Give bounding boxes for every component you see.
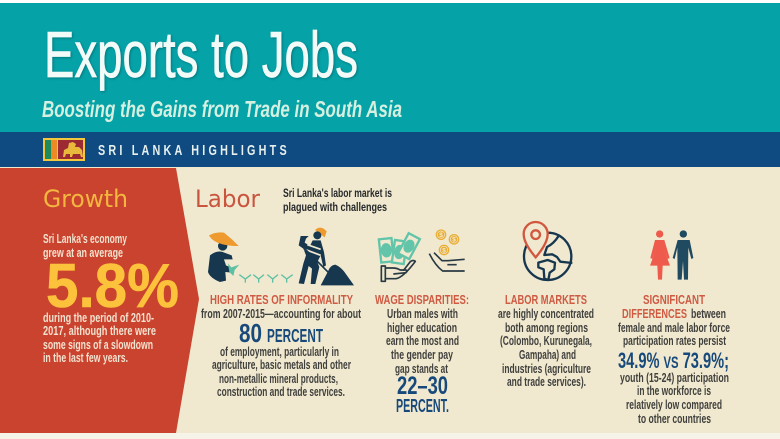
figure: 80 percent: PERCENT [267, 326, 323, 346]
panel: wage text [375, 292, 469, 416]
growth detail text [43, 311, 156, 365]
icon: farmer planting [208, 232, 293, 283]
icon: coins in hand: $ [442, 247, 446, 254]
panel: differences text: to other countries [638, 412, 711, 426]
icon: coins in hand: $ [439, 232, 443, 239]
panel: labor markets text: (Colombo, Kurunegala, [500, 334, 592, 348]
labor heading: Labor [195, 185, 260, 213]
panel: informality text: non-metallic mineral products, [219, 372, 338, 386]
panel: differences text: SIGNIFICANT [643, 292, 705, 307]
growth intro text: Sri Lanka's economy [43, 232, 127, 246]
panel: labor background [0, 167, 780, 433]
figure: 22-30 percent [396, 372, 449, 416]
panel: differences text: between [691, 307, 726, 321]
panel: wage text: the gender pay [391, 348, 453, 362]
icon: worker with shovel [299, 228, 354, 285]
figure: 22-30 percent: 22–30 [397, 372, 448, 400]
panel: wage text: earn the most and [386, 334, 459, 348]
panel: labor markets text [498, 292, 594, 389]
open hand [381, 260, 415, 281]
panel: labor markets text: Gampaha) and [519, 348, 576, 362]
panel: differences text: participation rates persist [623, 334, 727, 348]
subtitle: Boosting the Gains from Trade in South Asia [42, 96, 402, 122]
panel: labor markets text: industries (agriculture [502, 362, 591, 376]
panel: wage text: Urban males with [387, 307, 458, 321]
panel: labor markets text: LABOR MARKETS [505, 292, 587, 307]
panel: country band [0, 132, 780, 167]
figure: participation rates: 34.9% VS 73.9%; [618, 348, 729, 373]
labor intro: plagued with challenges [283, 200, 387, 214]
labor intro [283, 186, 392, 214]
panel: wage text: higher education [387, 321, 457, 335]
panel: labor markets text: are highly concentrated [498, 307, 594, 321]
panel: wage text: gap stands at [395, 362, 449, 376]
growth intro text: grew at an average [43, 246, 123, 260]
woman [650, 230, 670, 280]
labor intro: Sri Lanka's labor market is [283, 186, 392, 200]
panel: labor markets text: and trade services). [507, 375, 586, 389]
panel: informality text: construction and trade services. [217, 385, 345, 399]
growth detail text: 2017, although there were [43, 324, 156, 338]
icon: cash in hand [379, 233, 420, 281]
man [673, 230, 693, 280]
icon: woman and man [650, 230, 693, 280]
banknotes [379, 233, 420, 264]
panel: informality text: HIGH RATES OF INFORMALITY [210, 292, 353, 307]
panel: differences text [618, 292, 730, 426]
panel: informality text: from 2007-2015—accounting for about [201, 307, 362, 321]
title: Exports to Jobs [44, 18, 358, 91]
panel: growth [0, 168, 199, 433]
growth detail text: some signs of a slowdown [43, 338, 153, 352]
seedlings [239, 275, 293, 283]
panel: differences text: youth (15-24) participation [620, 371, 729, 385]
panel: differences text: relatively low compared [626, 398, 722, 412]
figure: 80 percent [239, 318, 323, 348]
icon: Sri Lanka flag [43, 138, 85, 161]
growth figure: 5.8% [46, 252, 179, 321]
panel: differences text: DIFFERENCES [622, 306, 687, 321]
panel: wage text: WAGE DISPARITIES: [375, 292, 469, 307]
growth detail text: in the last few years. [43, 351, 128, 365]
band label: SRI LANKA HIGHLIGHTS [98, 141, 287, 158]
panel: informality text: of employment, particularly in [220, 345, 339, 359]
icon: coins in hand [429, 229, 465, 271]
growth heading: Growth [43, 185, 128, 213]
panel: labor markets text: both among regions [505, 321, 588, 335]
growth detail text: during the period of 2010- [43, 311, 154, 325]
panel: header banner [0, 3, 780, 132]
figure: 80 percent: 80 [239, 318, 262, 348]
panel: differences text: in the workforce is [637, 384, 711, 398]
growth intro text [43, 232, 127, 260]
figure: 22-30 percent: PERCENT. [396, 396, 449, 416]
icon: coins in hand: $ [452, 236, 456, 243]
icon: location pin and globe [524, 222, 572, 280]
panel: informality text [201, 292, 362, 399]
panel: informality text: agriculture, basic metals and other [212, 358, 351, 372]
panel: differences text: female and male labor force [618, 321, 730, 335]
